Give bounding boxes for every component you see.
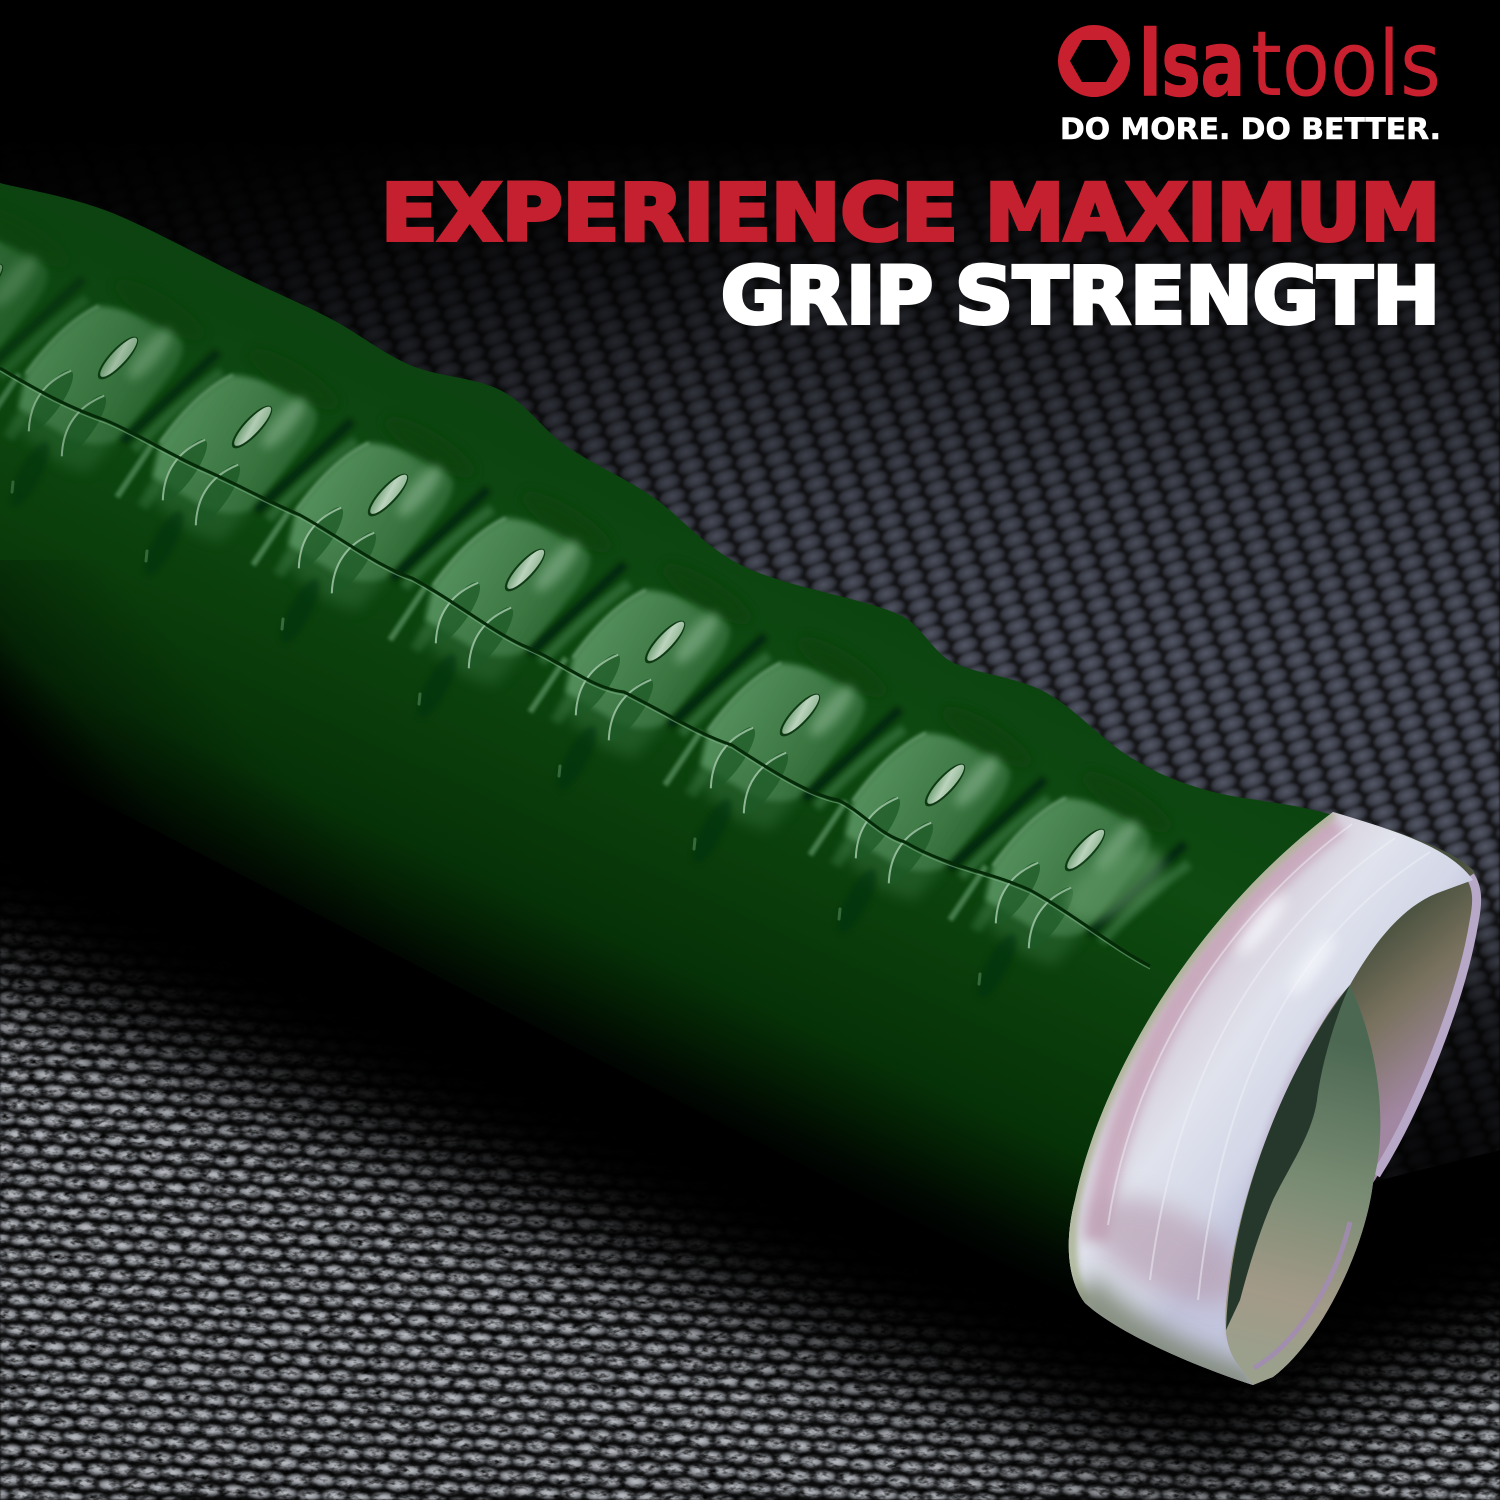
ring white highlights xyxy=(1188,880,1340,999)
heading line 2: GRIP xyxy=(721,252,933,342)
pink lower band xyxy=(1081,1186,1234,1310)
shadow right of tube end xyxy=(1100,820,1500,1500)
ring ridges xyxy=(1108,824,1430,1300)
green lens of the front lip xyxy=(1225,985,1380,1385)
olive edge xyxy=(1071,812,1333,1303)
fade at the far lower-left of the tube xyxy=(0,560,164,814)
heading line 1: MAXIMUM xyxy=(985,169,1440,259)
heading line 1: EXPERIENCE xyxy=(381,169,958,259)
green grip tape tube xyxy=(0,183,1333,1310)
tagline: DO MORE. DO BETTER. xyxy=(1060,112,1441,146)
inner edge mauve xyxy=(1232,1000,1345,1340)
silicone ring end of the tube xyxy=(1069,812,1480,1392)
grip ribs with embossed ovals xyxy=(0,197,1189,1003)
ring outer band xyxy=(1069,812,1473,1385)
lower mat shadow from tube xyxy=(0,750,1500,1500)
ring shading clipped to band xyxy=(1071,812,1430,1392)
upper mat left shadow xyxy=(0,150,700,650)
lower mat xyxy=(0,750,1500,1500)
wordmark bold: lsa xyxy=(1139,12,1245,117)
lower mat speckle xyxy=(0,919,1500,1500)
heading line 1 xyxy=(381,169,1440,259)
grey green bottom edge xyxy=(1078,1290,1255,1392)
heading line 2 xyxy=(721,252,1440,342)
dark interior of the tube xyxy=(1226,985,1350,1330)
overlap seam xyxy=(0,368,1150,966)
tube body xyxy=(0,183,1333,1310)
wordmark light: tools xyxy=(1251,12,1441,117)
pink tint along the rim xyxy=(1096,824,1338,1240)
lower mat texture xyxy=(0,920,1500,1500)
back rim lavender xyxy=(1376,876,1477,1175)
upper mat top shadow xyxy=(0,0,1500,1000)
seam highlight xyxy=(0,371,1150,969)
inner rim line xyxy=(1254,1222,1350,1368)
logo: Olsatools xyxy=(1058,12,1441,117)
icon: hex nut letter O xyxy=(1058,25,1130,97)
heading line 2: STRENGTH xyxy=(955,252,1440,342)
highlight patch near ring xyxy=(1061,844,1170,928)
back wall of the ring xyxy=(1069,812,1480,1385)
